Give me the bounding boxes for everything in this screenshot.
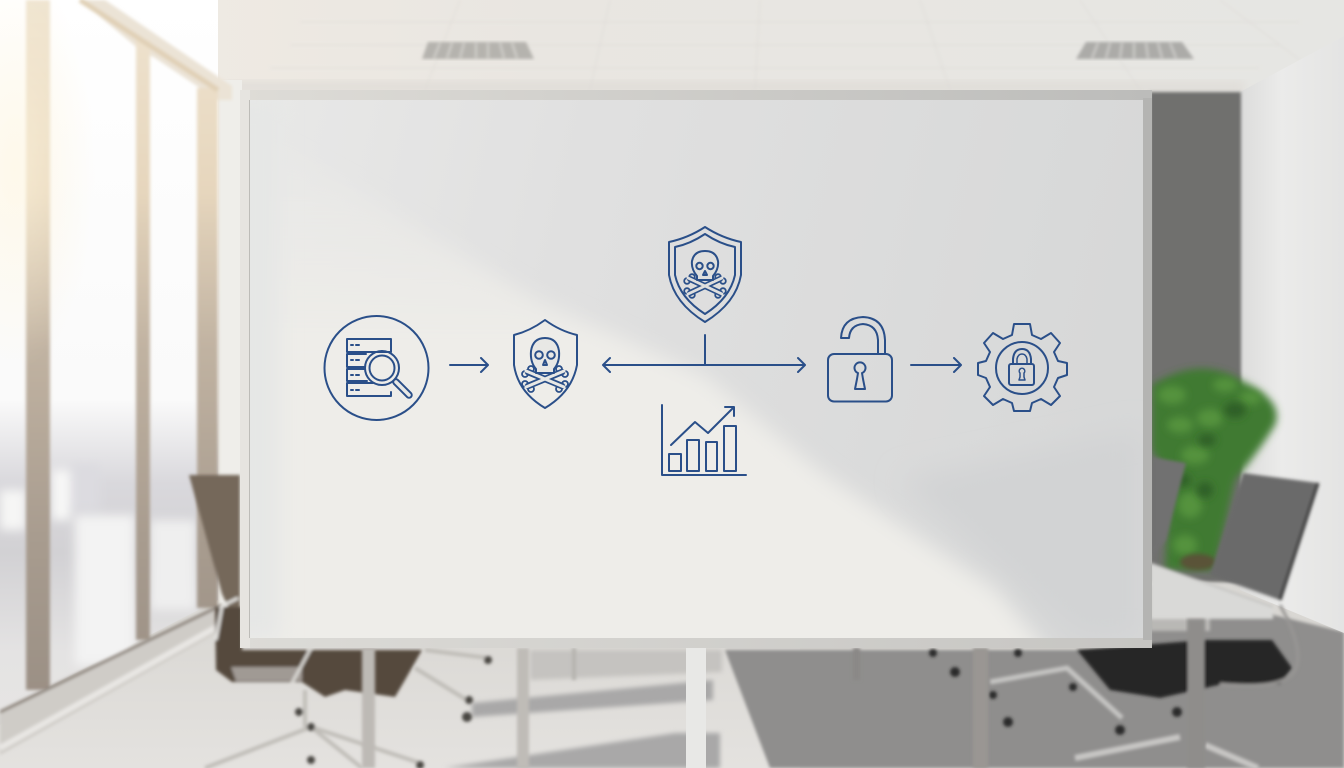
- icon: gear with lock: [978, 324, 1067, 411]
- lower-right shade: [900, 430, 1143, 640]
- dark wall panel: [1150, 92, 1241, 582]
- icon: open padlock: [828, 317, 892, 402]
- diagonal light: [200, 100, 1062, 670]
- sun glare: [0, 0, 95, 370]
- main stand pole: [686, 648, 706, 768]
- window sill: [0, 605, 222, 755]
- windows: [0, 0, 232, 755]
- ceiling: [0, 0, 1344, 100]
- left cool strip: [225, 100, 280, 640]
- board frame: [240, 90, 1152, 648]
- right chairs: [990, 457, 1318, 768]
- left wall strip: [216, 80, 242, 610]
- window frames: [26, 0, 232, 690]
- icon: skull shield: [514, 320, 577, 408]
- whiteboard: [200, 90, 1152, 670]
- table leg: [1187, 619, 1205, 768]
- dark floor right: [725, 585, 1344, 768]
- icon: top skull shield: [669, 227, 741, 322]
- arrow: branching connector: [603, 335, 805, 372]
- floor shadows: [444, 680, 720, 768]
- icon: database search: [324, 316, 428, 420]
- arrow: to gear: [911, 358, 961, 372]
- right wall: [1240, 36, 1344, 633]
- arrow: to shield: [450, 358, 488, 372]
- right chair wheels: [929, 649, 1182, 735]
- plant: [1152, 369, 1277, 570]
- ceiling vent left: [422, 42, 534, 59]
- stand poles: [362, 648, 988, 768]
- left chair: [189, 475, 492, 768]
- hazy city skyline: [0, 465, 196, 665]
- table: [1150, 563, 1273, 631]
- ceiling vent right: [1076, 42, 1194, 59]
- icon: rising bar chart: [662, 405, 746, 475]
- board surface: [250, 100, 1143, 638]
- floor: [0, 612, 800, 768]
